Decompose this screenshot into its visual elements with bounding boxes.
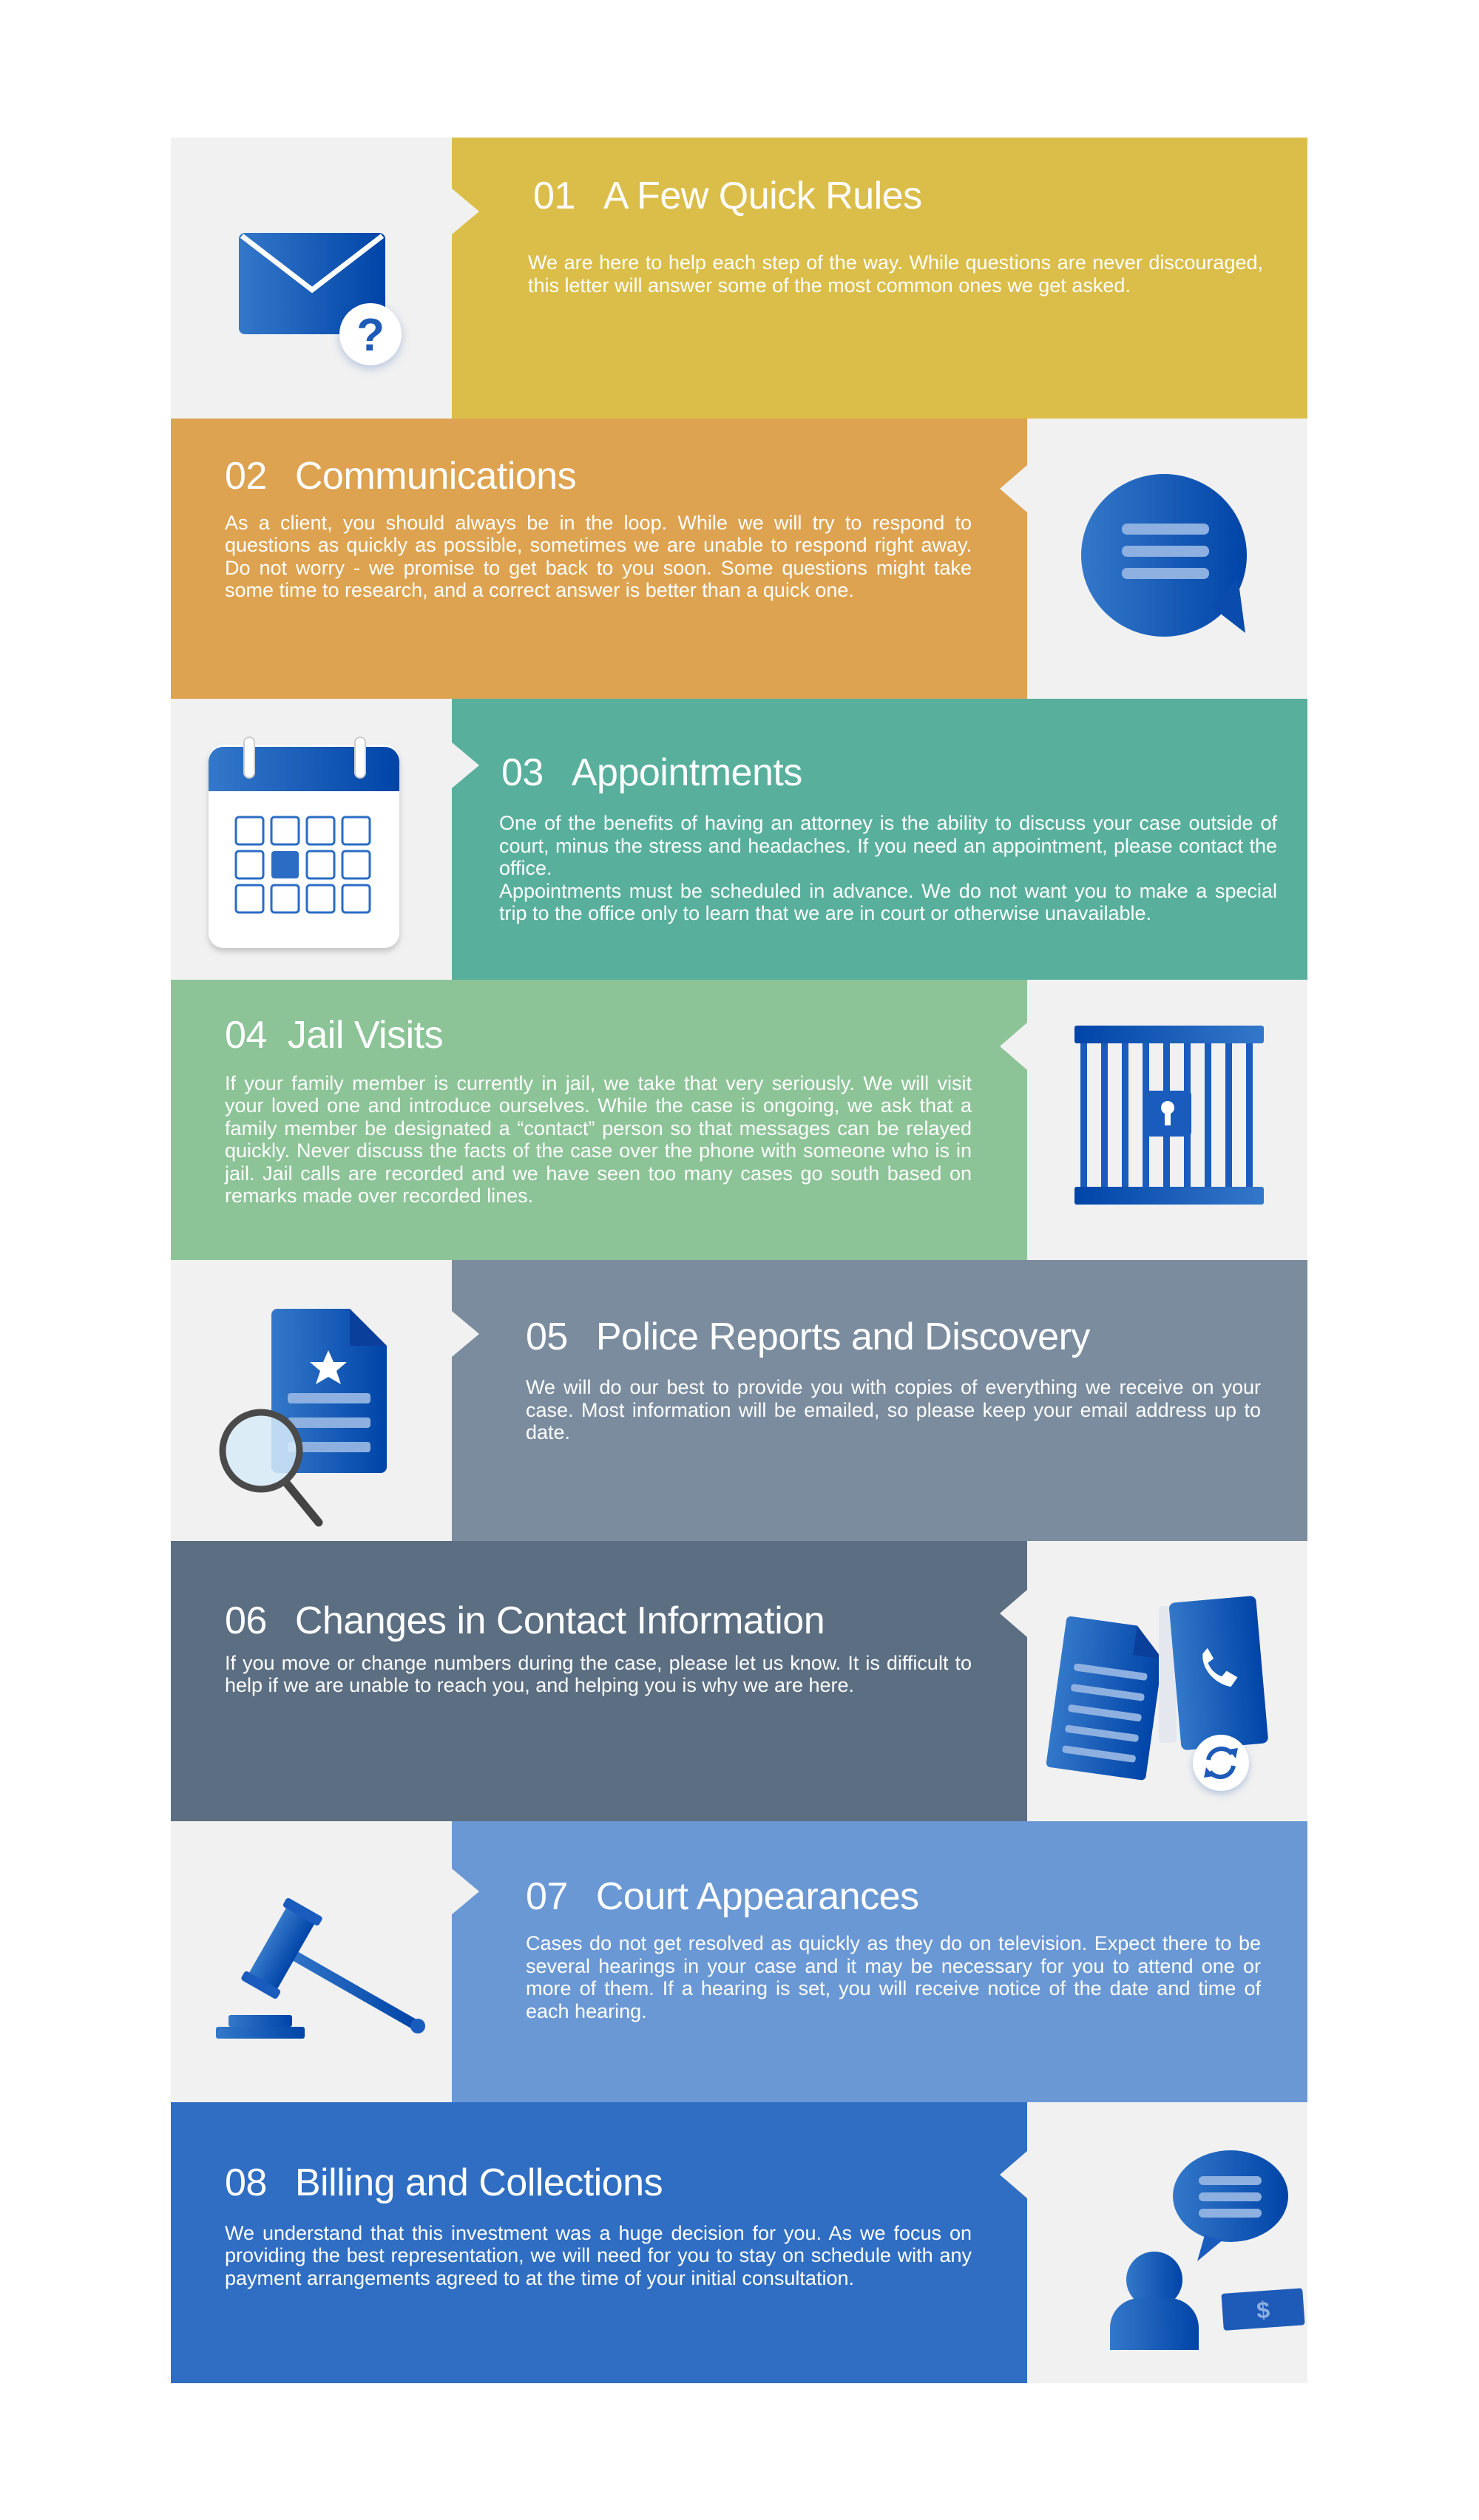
icon: envelope with question bbox=[239, 233, 406, 373]
panel: 05 Police Reports and Discovery bbox=[171, 1260, 1307, 1541]
icon: gavel bbox=[216, 1898, 425, 2039]
panel: 08 Billing and Collections bbox=[171, 2102, 1307, 2383]
icon: police report with magnifier bbox=[219, 1309, 387, 1526]
heading: 04 Jail Visits bbox=[225, 1013, 443, 1056]
icon: client with bubble and money: $ bbox=[1256, 2296, 1270, 2323]
heading: 07 Court Appearances bbox=[526, 1875, 919, 1918]
heading: 05 Police Reports and Discovery bbox=[526, 1315, 1090, 1358]
icon: documents with phone and refresh bbox=[1046, 1596, 1268, 1798]
heading: 08 Billing and Collections bbox=[225, 2161, 663, 2204]
text block: As a client, you should always be in the loop. While we will try to respond to questions as quickly as possible, sometimes we are unable to respond right away. Do not worry - we promise to get back to you soon. Some questions might take some time to research, and a correct answer is better than a quick one. bbox=[225, 512, 972, 601]
heading: 02 Communications bbox=[225, 454, 576, 497]
heading: 01 A Few Quick Rules bbox=[533, 175, 922, 217]
text block: We understand that this investment was a huge decision for you. As we focus on providing the best representation, we will need for you to stay on schedule with any payment arrangements agreed to at the time of your initial consultation. bbox=[225, 2221, 972, 2289]
icon: calendar bbox=[206, 736, 402, 954]
heading: 03 Appointments bbox=[501, 751, 802, 794]
text block: One of the benefits of having an attorney is the ability to discuss your case outside of court, minus the stress and headaches. If you need an appointment, please contact the office. bbox=[499, 812, 1277, 879]
panel: 04 Jail Visits bbox=[171, 980, 1307, 1260]
text block: We will do our best to provide you with copies of everything we receive on your case. Most information will be emailed, so please keep your email address up to date. bbox=[526, 1376, 1261, 1443]
text block: Cases do not get resolved as quickly as they do on television. Expect there to be several hearings in your case and it may be necessary for you to attend one or more of them. If a hearing is set, you will receive notice of the date and time of each hearing. bbox=[526, 1932, 1261, 2022]
text block: Appointments must be scheduled in advance. We do not want you to make a special trip to the office only to learn that we are in court or otherwise unavailable. bbox=[499, 880, 1277, 924]
icon: envelope with question: ? bbox=[356, 310, 385, 361]
text block: We are here to help each step of the way. While questions are never discouraged, this letter will answer some of the most common ones we get asked. bbox=[528, 251, 1263, 296]
panel: 06 Changes in Contact Information bbox=[171, 1541, 1307, 1821]
icon: jail bars bbox=[1074, 1026, 1264, 1205]
panel: 02 Communications bbox=[171, 419, 1307, 699]
panel: 07 Court Appearances bbox=[171, 1821, 1307, 2102]
text block: If you move or change numbers during the case, please let us know. It is difficult to help if we are unable to reach you, and helping you is why we are here. bbox=[225, 1652, 972, 1696]
icon: chat bubble bbox=[1081, 474, 1247, 637]
heading: 06 Changes in Contact Information bbox=[225, 1599, 825, 1642]
text block bbox=[499, 812, 1278, 924]
panel: 03 Appointments bbox=[171, 699, 1307, 980]
icon: client with bubble and money bbox=[1110, 2150, 1304, 2350]
panel: 01 A Few Quick Rules bbox=[171, 138, 1307, 419]
text block: If your family member is currently in jail, we take that very seriously. We will visit your loved one and introduce ourselves. While the case is ongoing, we ask that a family member be designated a “contact” person so that messages can be relayed quickly. Never discuss the facts of the case over the phone with someone who is in jail. Jail calls are recorded and we have seen too many cases go south based on remarks made over recorded lines. bbox=[225, 1072, 972, 1207]
